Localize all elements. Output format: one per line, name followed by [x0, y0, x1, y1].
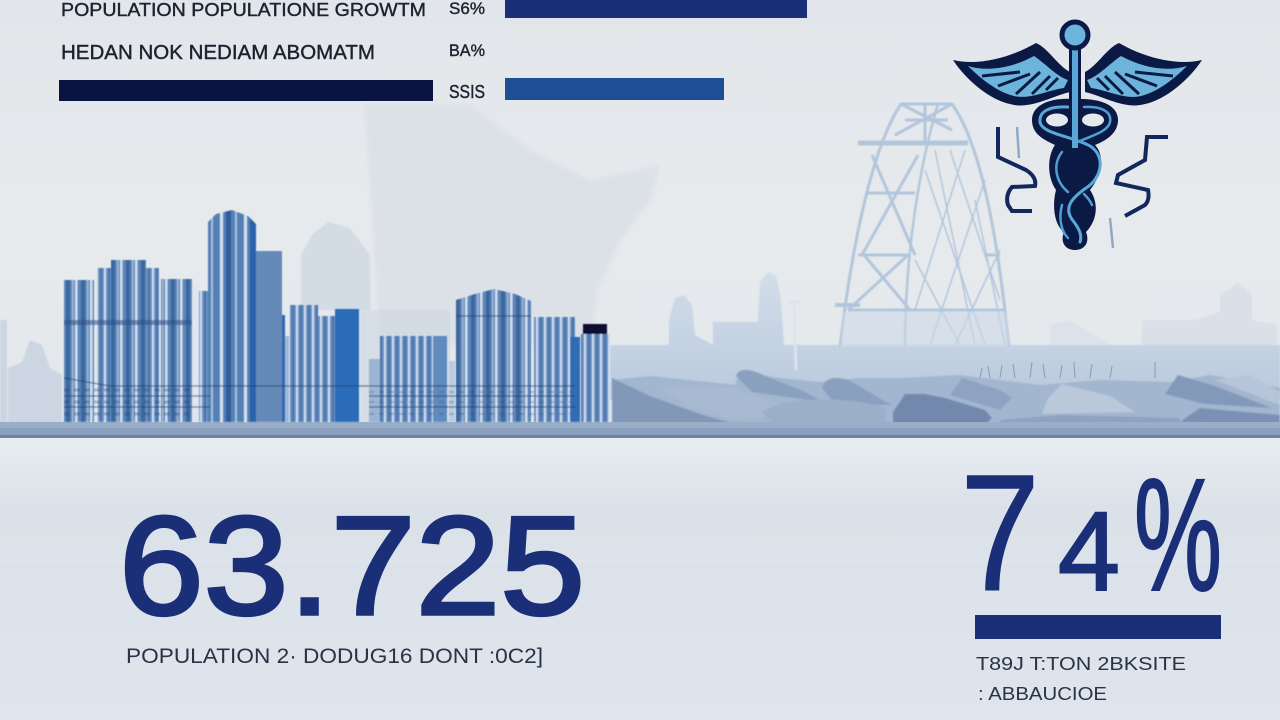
central tall tower [208, 210, 289, 422]
left bracket [998, 127, 1035, 211]
percent bar [975, 615, 1221, 639]
row 3 dark bar [59, 80, 433, 101]
row 3 value: SSIS [449, 82, 485, 102]
percent stat [960, 441, 1222, 626]
row 2 label: HEDAN NOK NEDIAM ABOMATM [61, 42, 375, 64]
arched block [456, 289, 610, 422]
power lines and lower windows [64, 316, 575, 414]
percent stat: 4 [1058, 489, 1120, 614]
left wing [953, 43, 1070, 105]
percent caption line 2: : ABBAUCIOE [978, 684, 1107, 704]
percent stat: 7 [960, 441, 1040, 626]
city buildings [64, 210, 610, 422]
caduceus icon [953, 22, 1202, 250]
building group left [64, 260, 210, 422]
right wing [1085, 43, 1202, 105]
percent caption line 1: T89J T:TON 2BKSITE [976, 654, 1186, 674]
right hazy skyline [610, 272, 1280, 400]
percent stat: % [1134, 445, 1222, 624]
background upper [0, 0, 1280, 430]
ground band [0, 422, 1280, 438]
background lower [0, 438, 1280, 720]
rocky shoreline [612, 370, 1280, 428]
big number: 63.725 [119, 487, 585, 644]
faint map silhouette [365, 105, 660, 345]
reeds on shore [980, 362, 1155, 378]
staff [1069, 48, 1081, 136]
small marks [1017, 127, 1113, 248]
low block [369, 336, 455, 422]
bridge tower [835, 104, 1010, 347]
left hazy skyline [0, 310, 450, 425]
mid buildings [290, 305, 359, 422]
staff ball [1062, 22, 1088, 48]
right bracket [1116, 137, 1168, 216]
row 1 bar [505, 0, 807, 18]
big number caption: POPULATION 2· DODUG16 DONT :0C2] [126, 645, 543, 668]
snakes [1032, 99, 1118, 250]
faint tower silhouette [301, 222, 371, 310]
row 3 bar [505, 78, 724, 100]
row 2 value: BA% [449, 41, 485, 60]
